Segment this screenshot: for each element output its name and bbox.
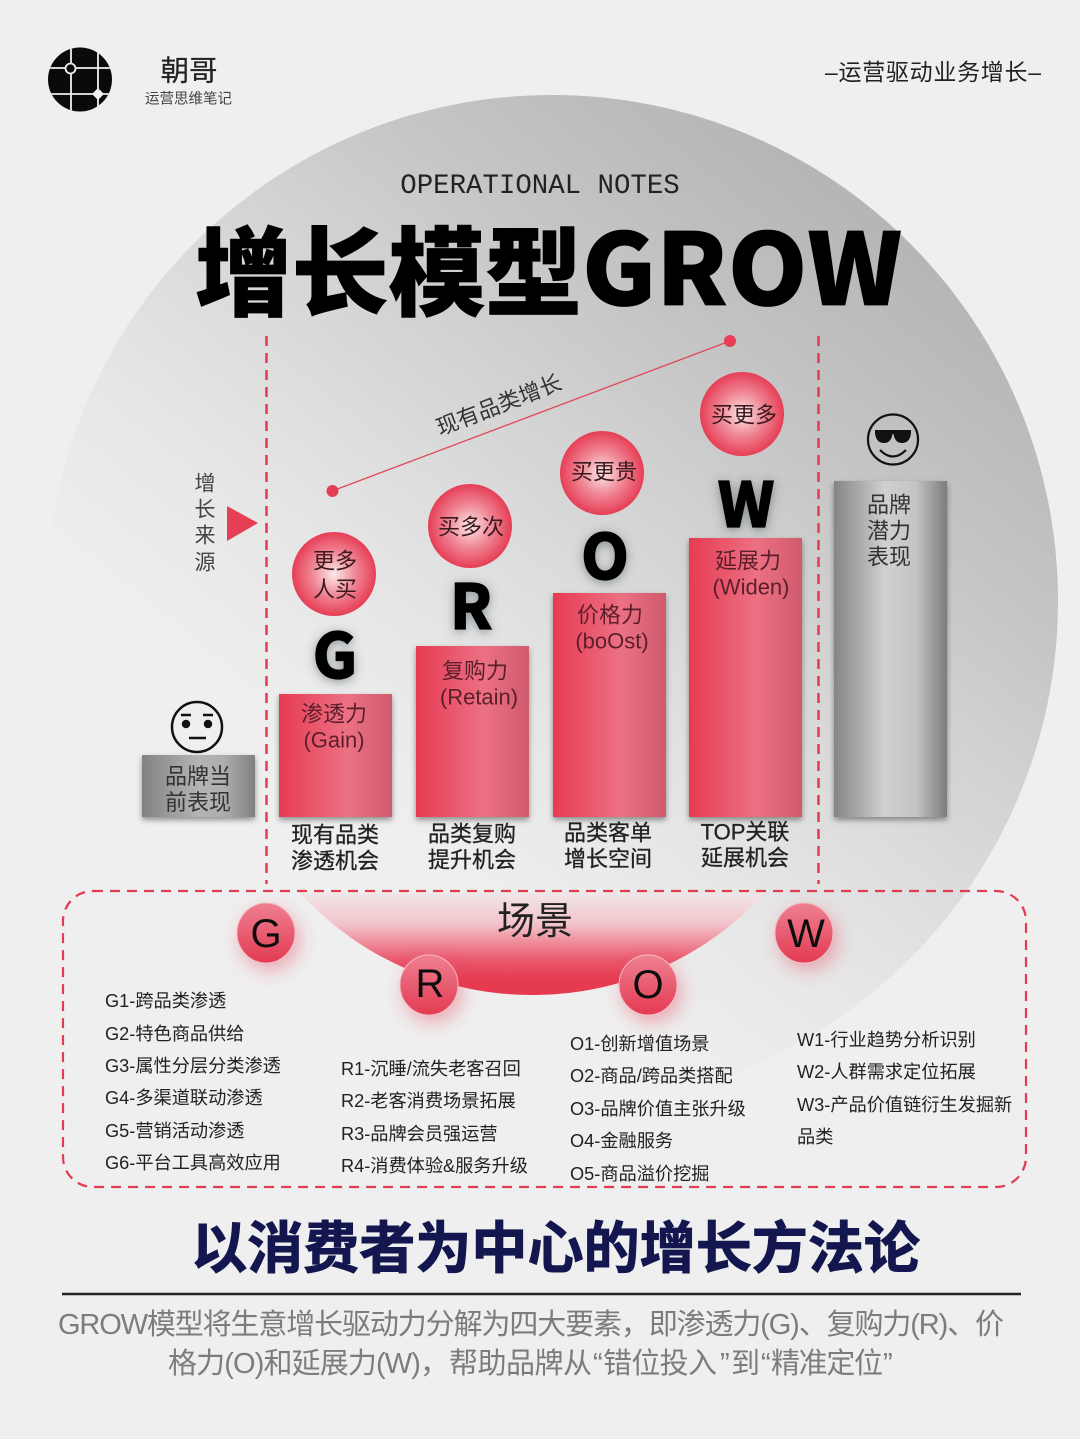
bar: current brand: 品牌当 [165,764,231,789]
list R: R3-品牌会员强运营 [341,1124,498,1144]
bar: current brand [142,755,255,817]
list O: O1-创新增值场景 [570,1034,709,1054]
column W: 买更多 [711,403,777,428]
panel: scenes [63,891,1026,1187]
list G [105,991,281,1173]
summary paragraph: “ [761,1348,771,1380]
column O: 增长空间 [564,847,652,872]
column O: 价格力 [577,603,643,628]
summary paragraph: GROW模型将生意增长驱动力分解为四大要素，即渗透力(G)、复购力(R)、价 [58,1308,1004,1341]
list G: G4-多渠道联动渗透 [105,1088,263,1108]
list R: R4-消费体验&服务升级 [341,1156,528,1176]
column W: TOP关联 [701,820,789,845]
scene ball G: G [250,912,282,956]
list G: G1-跨品类渗透 [105,991,226,1011]
bar: brand potential: 品牌 [867,493,911,518]
summary paragraph: 到 [731,1348,760,1380]
growth line [326,335,736,497]
scene box outline [63,891,1026,1187]
column G: 更多 [313,549,357,574]
list O: O3-品牌价值主张升级 [570,1099,746,1119]
column O: 品类客单 [564,821,652,846]
column G: G [313,607,357,696]
summary paragraph: “ [593,1348,603,1380]
dashed guides [266,336,818,884]
list G: G2-特色商品供给 [105,1024,244,1044]
column W: 延展机会 [701,846,789,871]
growth source label: 源 [194,552,216,575]
growth line label: 现有品类增长 [433,370,565,440]
summary paragraph: ” [720,1348,730,1380]
column W [689,372,802,871]
column O: (boOst) [575,629,649,654]
main title: 增长模型 [195,196,582,336]
scene ball O [619,955,677,1015]
list G: G6-平台工具高效应用 [105,1153,281,1173]
scene ball G [237,903,295,963]
column G [279,532,392,874]
list W: W2-人群需求定位拓展 [797,1062,976,1082]
scene ball O: O [632,963,664,1007]
column O [553,431,666,872]
column W: (Widen) [712,575,790,600]
arrow triangle [227,506,258,541]
growth source label [194,473,216,575]
scene bowl [300,893,765,995]
scene ball R [400,955,458,1015]
growth source label: 来 [194,525,216,548]
list R: R2-老客消费场景拓展 [341,1091,516,1111]
scene ball W: W [787,912,825,956]
brand name: 朝哥 [160,56,218,88]
main title: GROW [582,190,902,334]
logo icon [48,48,112,112]
list R [341,1059,528,1176]
list W [797,1030,1012,1147]
column R: R [450,558,492,647]
list G: G3-属性分层分类渗透 [105,1056,281,1076]
icon: sunglasses face [868,414,918,464]
summary paragraph: 精准定位 [771,1347,883,1380]
list W: 品类 [797,1127,833,1147]
bar: brand potential: 潜力 [867,519,911,544]
column R [416,484,529,873]
list R: R1-沉睡/流失老客召回 [341,1059,521,1079]
column R: 品类复购 [428,822,516,847]
brand name [145,56,232,108]
summary paragraph [58,1308,1004,1380]
summary paragraph: ” [883,1348,893,1380]
divider [62,1293,1021,1295]
summary paragraph: 帮助品牌从 [449,1347,592,1380]
subtitle: OPERATIONAL NOTES [400,171,680,202]
scene heading: 场景 [497,901,573,943]
background circle [46,95,1058,1107]
bar: brand potential: 表现 [867,545,911,570]
column R: 提升机会 [428,848,516,873]
scene ball W [775,903,833,963]
growth source label: 长 [194,499,216,522]
top right slogan: –运营驱动业务增长– [825,59,1041,85]
list O: O4-金融服务 [570,1131,673,1151]
column R: 复购力 [442,659,508,684]
column W: W [718,456,774,545]
growth source label: 增 [194,473,216,496]
bar: current brand: 前表现 [165,790,231,815]
list O [570,1034,746,1184]
list G: G5-营销活动渗透 [105,1121,244,1141]
bottom heading: 以消费者为中心的增长方法论 [191,1217,920,1280]
scene ball R: R [416,962,444,1006]
list O: O2-商品/跨品类搭配 [570,1066,733,1086]
column G: 现有品类 [291,823,379,848]
list W: W3-产品价值链衍生发掘新 [797,1095,1012,1115]
column G: 人买 [313,577,357,602]
brand name: 运营思维笔记 [145,91,232,108]
icon: neutral face [172,702,222,752]
column G: (Gain) [303,728,365,753]
column R: 买多次 [438,515,504,540]
summary paragraph: 错位投入 [603,1347,717,1380]
column O: O [582,508,628,597]
column R: (Retain) [440,685,518,710]
list O: O5-商品溢价挖掘 [570,1164,709,1184]
column G: 渗透机会 [291,849,379,874]
column G: 渗透力 [301,702,367,727]
column O: 买更贵 [571,460,637,485]
summary paragraph: 格力(O)和延展力(W)， [168,1347,449,1380]
bar: brand potential [834,481,947,817]
main title [195,190,902,336]
column W: 延展力 [715,549,781,574]
list W: W1-行业趋势分析识别 [797,1030,976,1050]
